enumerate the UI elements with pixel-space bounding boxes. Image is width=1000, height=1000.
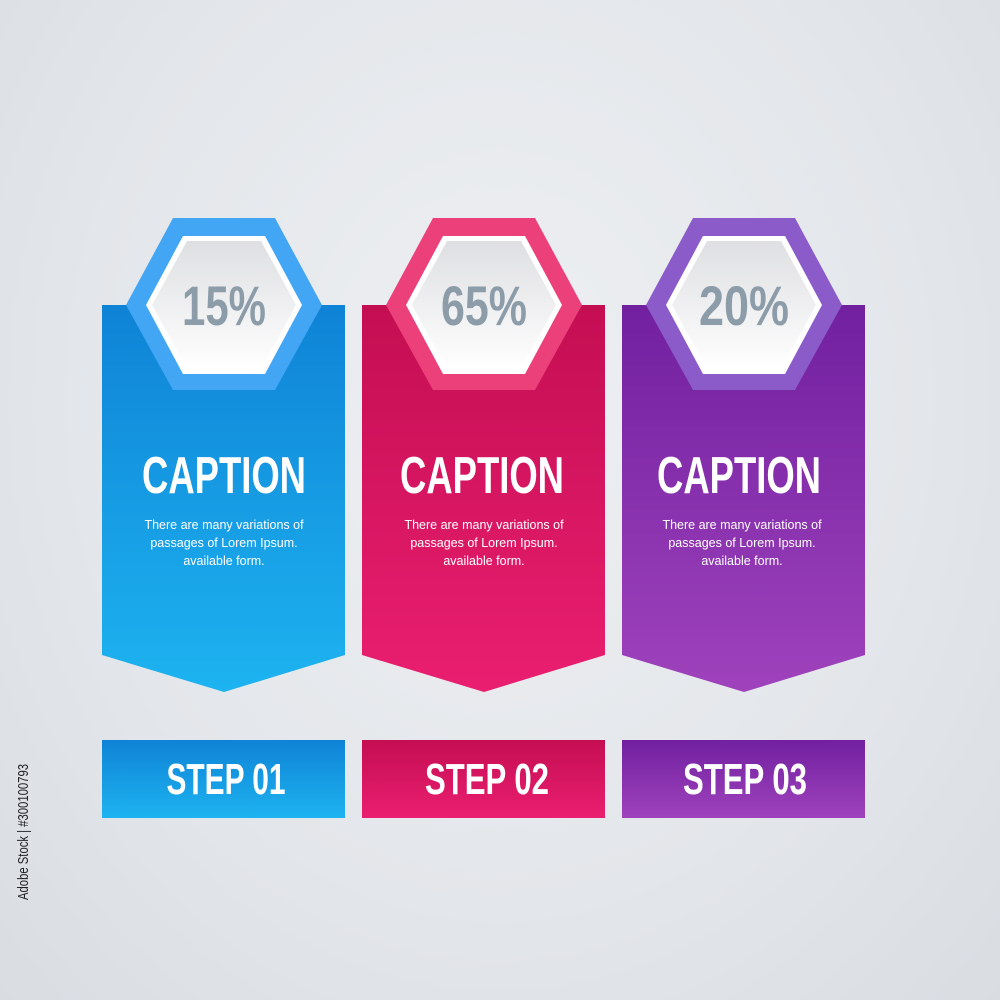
step label 02: STEP 02 xyxy=(425,755,549,804)
body text 2: passages of Lorem Ipsum. xyxy=(410,536,558,550)
step label 01: STEP 01 xyxy=(166,755,286,804)
body text 2: There are many variations of xyxy=(404,518,564,532)
body text 1: available form. xyxy=(183,554,265,568)
step label 03: STEP 03 xyxy=(683,755,807,804)
banner body 1 xyxy=(102,305,345,692)
body text 2: available form. xyxy=(443,554,525,568)
percentage 65%: 65% xyxy=(441,274,527,337)
body text 1: There are many variations of xyxy=(144,518,304,532)
body text 3: passages of Lorem Ipsum. xyxy=(668,536,816,550)
hexagon badge 2 xyxy=(386,218,582,390)
percentage 15%: 15% xyxy=(182,274,266,337)
caption heading 3: CAPTION xyxy=(657,447,821,505)
panel: step 2 xyxy=(362,218,605,692)
panel: step 3 xyxy=(622,218,865,692)
vertical stock id text: Adobe Stock | #300100793 xyxy=(15,764,32,900)
body text 3: available form. xyxy=(701,554,783,568)
caption heading 1: CAPTION xyxy=(142,447,306,505)
hexagon badge 1 xyxy=(126,218,322,390)
step label 02 xyxy=(362,740,605,818)
body text 3: There are many variations of xyxy=(662,518,822,532)
banner body 2 xyxy=(362,305,605,692)
panel: step 1 xyxy=(102,218,345,692)
body text 1: passages of Lorem Ipsum. xyxy=(150,536,298,550)
hexagon badge 3 xyxy=(646,218,842,390)
step label 03 xyxy=(622,740,865,818)
caption heading 2: CAPTION xyxy=(400,447,564,505)
percentage 20%: 20% xyxy=(699,274,789,337)
step label 01 xyxy=(102,740,345,818)
banner body 3 xyxy=(622,305,865,692)
